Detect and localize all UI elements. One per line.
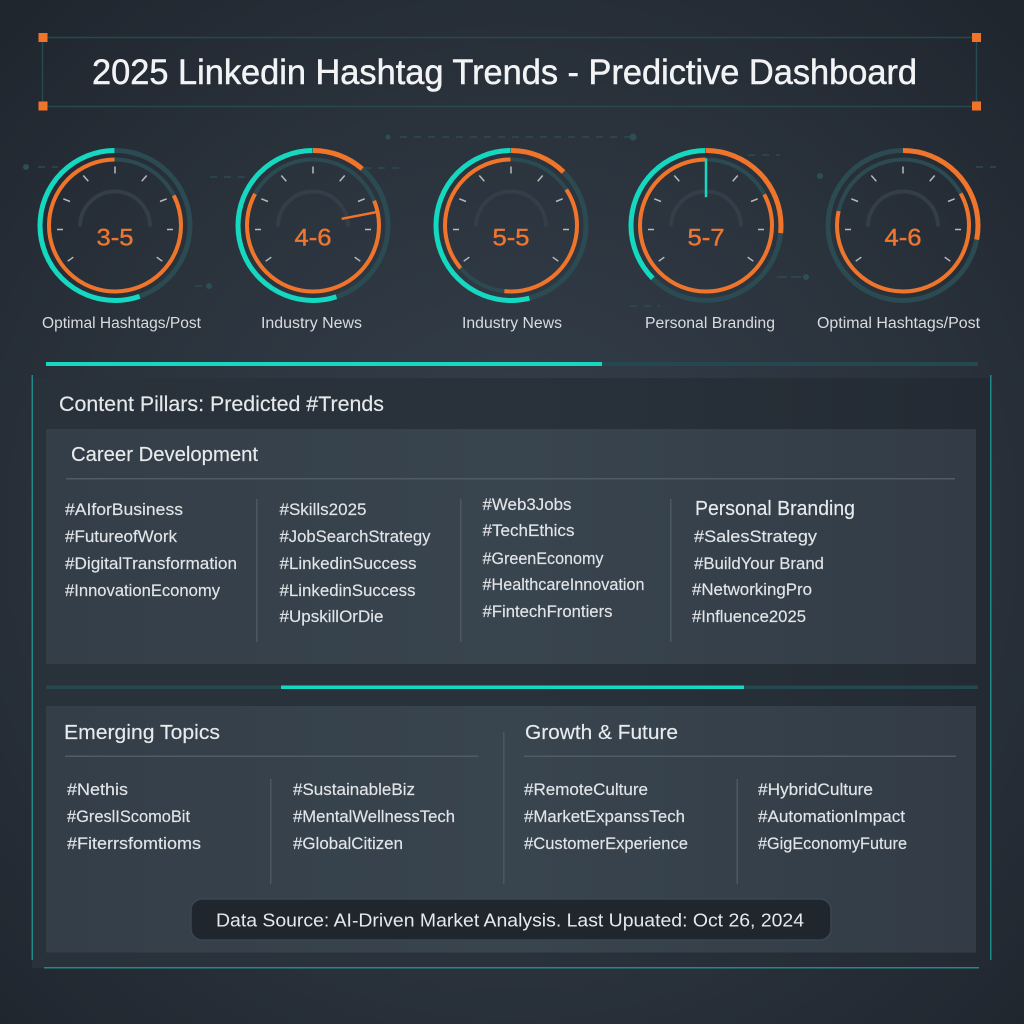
growth column 1: #CustomerExperience xyxy=(524,835,688,853)
hashtag column 2: #LinkedinSuccess xyxy=(280,555,416,573)
gauge: personal branding 5-7: Personal Branding xyxy=(645,315,775,332)
hashtag column 2: #JobSearchStrategy xyxy=(280,528,431,546)
title: 2025 Linkedin Hashtag Trends - Predictive Dashboard xyxy=(92,53,917,92)
hashtag column 2 xyxy=(280,501,431,626)
data source pill: Data Source: AI-Driven Market Analysis. Last Upuated: Oct 26, 2024 xyxy=(216,910,804,930)
hashtag column 2: #UpskillOrDie xyxy=(280,608,384,626)
gauge: industry news 4-6: Industry News xyxy=(261,315,362,332)
panel: career development xyxy=(46,429,976,664)
gauge: optimal hashtags 4-6: Optimal Hashtags/Post xyxy=(817,315,981,332)
hashtag column 1: #InnovationEconomy xyxy=(65,582,221,600)
panel: emerging topics and growth xyxy=(46,706,976,952)
heading: career development: Career Development xyxy=(71,444,258,466)
emerging column 2: #SustainableBiz xyxy=(293,781,415,799)
progress divider: top xyxy=(46,362,978,366)
growth column 1: #RemoteCulture xyxy=(524,781,648,799)
hashtag column 3: #TechEthics xyxy=(482,522,574,540)
hashtag column 1: #FutureofWork xyxy=(65,528,178,546)
heading: emerging topics: Emerging Topics xyxy=(64,722,220,744)
growth column 2: #AutomationImpact xyxy=(758,808,905,826)
gauge: personal branding 5-7: 5-7 xyxy=(688,224,725,252)
growth column 2: #GigEconomyFuture xyxy=(758,835,907,853)
hashtag column 2: #Skills2025 xyxy=(280,501,366,519)
emerging column 1: #GreslIScomoBit xyxy=(67,808,190,826)
progress divider: middle xyxy=(46,686,978,689)
gauge: optimal hashtags 3-5: Optimal Hashtags/Post xyxy=(42,315,202,332)
title box xyxy=(38,33,981,110)
heading: content pillars: Content Pillars: Predicted #Trends xyxy=(59,393,384,416)
gauge: industry news 4-6: 4-6 xyxy=(294,224,332,252)
gauge: optimal hashtags 3-5 xyxy=(40,150,202,332)
hashtag column 3: #FintechFrontiers xyxy=(482,603,612,621)
growth column 1: #MarketExpanssTech xyxy=(524,808,685,826)
emerging column 1 xyxy=(67,781,201,853)
hashtag column 2: #LinkedinSuccess xyxy=(280,582,416,600)
hashtag column 3: #HealthcareInnovation xyxy=(482,576,644,594)
gauge: personal branding 5-7 xyxy=(631,150,781,332)
gauge: industry news 5-5 xyxy=(436,150,586,332)
main frame xyxy=(32,375,992,968)
gauge: optimal hashtags 4-6: 4-6 xyxy=(884,224,922,252)
growth column 2 xyxy=(758,781,907,853)
hashtag column 4: personal branding: #Influence2025 xyxy=(692,608,806,626)
hashtag column 4: personal branding: #NetworkingPro xyxy=(692,581,812,599)
hashtag column 4: personal branding: Personal Branding xyxy=(695,498,855,520)
gauge: industry news 4-6 xyxy=(238,150,388,332)
hashtag column 3: #Web3Jobs xyxy=(482,496,572,514)
hashtag column 4: personal branding: #SalesStrategy xyxy=(694,528,818,546)
hashtag column 1: #DigitalTransformation xyxy=(65,555,237,573)
hashtag column 4: personal branding xyxy=(692,498,855,626)
emerging column 2 xyxy=(293,781,455,853)
hashtag column 1 xyxy=(65,501,237,600)
emerging column 2: #GlobalCitizen xyxy=(293,835,403,853)
hashtag column 3: #GreenEconomy xyxy=(482,550,604,568)
emerging column 1: #Fiterrsfomtioms xyxy=(67,835,201,853)
growth column 1 xyxy=(524,781,688,853)
emerging column 2: #MentalWellnessTech xyxy=(293,808,455,826)
heading: growth and future: Growth & Future xyxy=(525,722,678,744)
emerging column 1: #Nethis xyxy=(67,781,128,799)
hashtag column 1: #AIforBusiness xyxy=(65,501,183,519)
gauge: industry news 5-5: 5-5 xyxy=(492,224,530,252)
hashtag column 4: personal branding: #BuildYour Brand xyxy=(694,555,824,573)
gauge: optimal hashtags 4-6 xyxy=(817,150,981,332)
gauge: optimal hashtags 3-5: 3-5 xyxy=(96,224,134,252)
data source pill xyxy=(191,899,831,940)
hashtag column 3 xyxy=(482,496,644,621)
gauge: industry news 5-5: Industry News xyxy=(462,315,562,332)
growth column 2: #HybridCulture xyxy=(758,781,873,799)
